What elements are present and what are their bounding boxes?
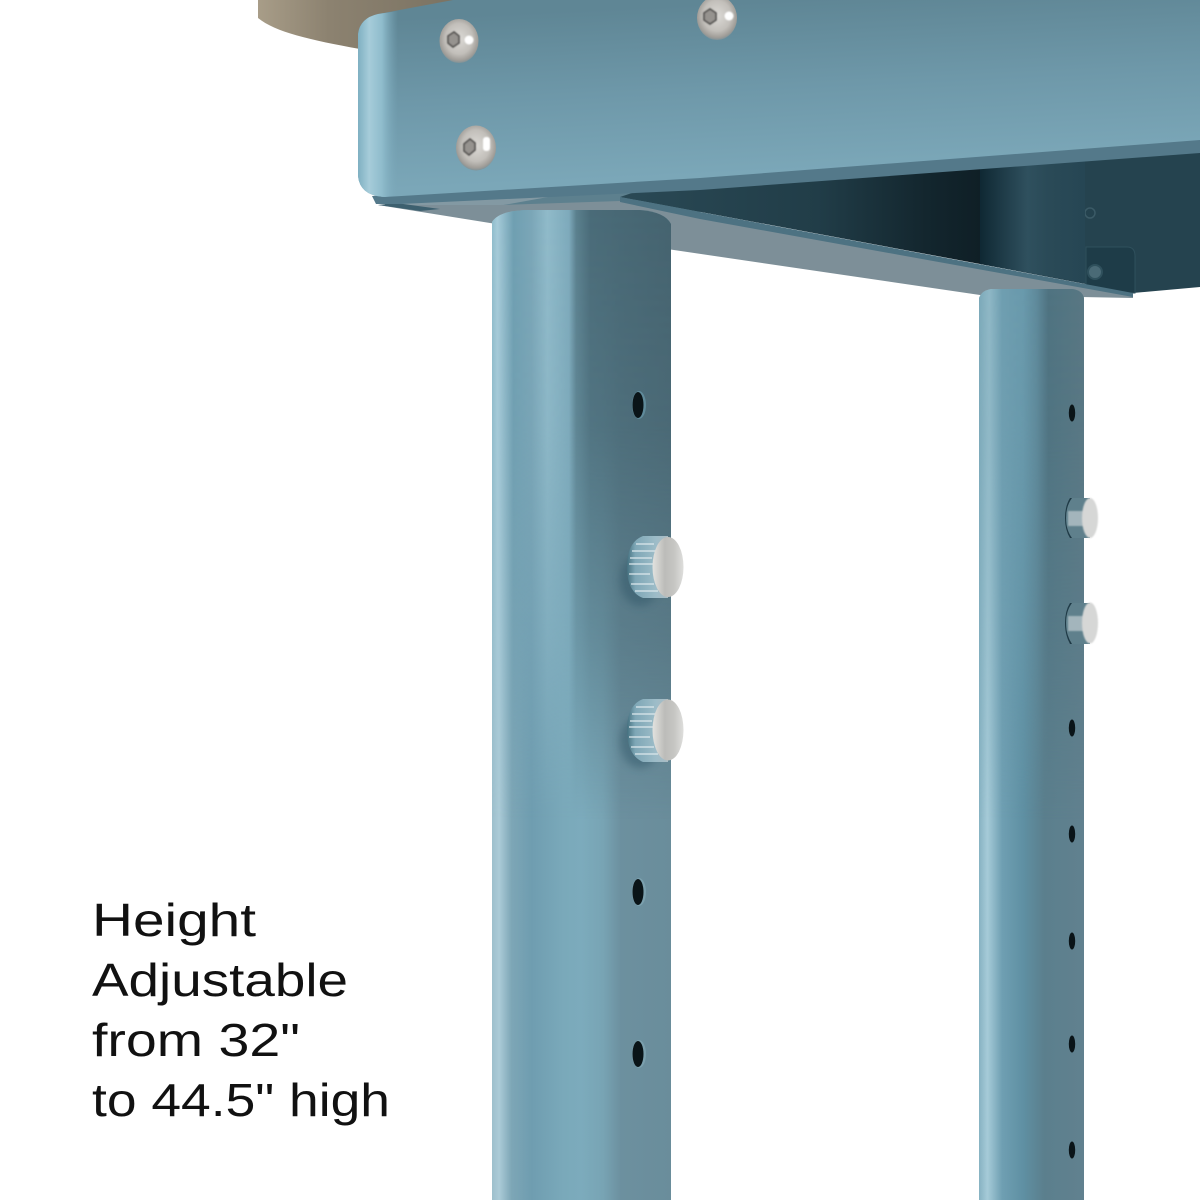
knob upper right: [1065, 498, 1098, 538]
knob lower right: [1065, 602, 1098, 644]
knob lower left: [620, 699, 684, 768]
right leg: [979, 289, 1084, 1200]
left leg: [492, 210, 671, 1200]
rear upper post: [980, 160, 1085, 283]
apron lower lip: [372, 138, 1200, 204]
bottom flange strip: [378, 197, 1133, 298]
caption text: from 32": [92, 1014, 300, 1066]
table top wood edge: [258, 0, 460, 49]
screw 1: [440, 19, 478, 63]
caption text: Adjustable: [92, 954, 348, 1006]
right leg adjustment holes: [1069, 404, 1075, 1158]
screw 3: [456, 126, 496, 170]
knob upper left: [620, 536, 684, 606]
caption text: to 44.5" high: [92, 1074, 390, 1126]
table apron: [358, 0, 1200, 197]
left leg adjustment holes: [632, 391, 646, 1068]
underside of table frame: [385, 130, 1200, 293]
screw 2: [697, 0, 737, 40]
caption text: [92, 894, 390, 1126]
caption text: Height: [92, 894, 256, 946]
